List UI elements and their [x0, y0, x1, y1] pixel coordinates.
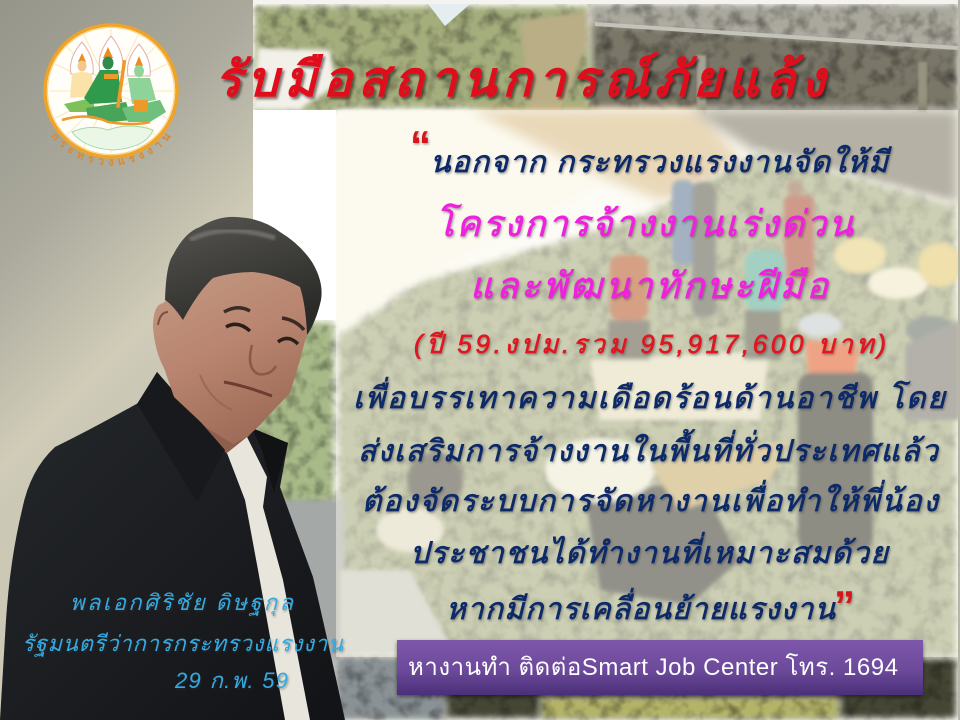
- quote text block: [353, 122, 947, 629]
- near bank vegetation: [336, 150, 958, 660]
- shirt: [227, 437, 310, 720]
- quote line 3: ส่งเสริมการจ้างงานในพื้นที่ทั่วประเทศแล้ว: [358, 429, 940, 468]
- contact text: หางานทำ ติดต่อSmart Job Center โทร. 1694: [408, 653, 898, 681]
- dark vegetation strip: [336, 657, 958, 720]
- date: 29 ก.พ. 59: [174, 668, 288, 693]
- workers: [340, 162, 960, 660]
- minister portrait: [0, 217, 345, 720]
- translucent washed overlay: [336, 110, 958, 657]
- clouds: [72, 126, 153, 150]
- jacket: [0, 372, 345, 720]
- attribution: [22, 590, 344, 693]
- hair: [165, 217, 322, 335]
- shirt collar left edge: [158, 372, 172, 398]
- right lapel: [252, 428, 288, 492]
- closing quote mark: ”: [834, 582, 855, 629]
- minister name: พลเอกศิริชัย ดิษฐกุล: [70, 590, 295, 616]
- eyes: [226, 324, 250, 331]
- ear shadow: [158, 312, 168, 325]
- water: [334, 107, 703, 116]
- quote line 1: นอกจาก กระทรวงแรงงานจัดให้มี: [430, 145, 892, 179]
- quote line 5: ประชาชนได้ทำงานที่เหมาะสมด้วย: [410, 532, 890, 570]
- highlighted project name: โครงการจ้างงานเร่งด่วน: [435, 203, 854, 244]
- neck: [178, 400, 268, 455]
- ministry name: กระทรวงแรงงาน: [51, 133, 171, 166]
- background photo: canal workers and bridge: [253, 4, 960, 720]
- quote line 2: เพื่อบรรเทาความเดือดร้อนด้านอาชีพ โดย: [353, 377, 947, 415]
- eyebrows: [224, 308, 250, 312]
- logo: Ministry of Labour seal: [43, 23, 179, 166]
- nose: [250, 345, 276, 374]
- opening quote mark: “: [410, 122, 431, 169]
- budget line: (ปี 59.งปม.รวม 95,917,600 บาท): [414, 329, 886, 359]
- quote line 6: หากมีการเคลื่อนย้ายแรงงาน: [446, 588, 836, 626]
- left grey panel: [0, 0, 253, 720]
- title: รับมือสถานการณ์ภัยแล้ง: [215, 52, 829, 107]
- contact callout: [397, 640, 923, 695]
- mouth: [224, 382, 272, 396]
- seal ring: [45, 25, 177, 157]
- highlighted skills line: และพัฒนาทักษะฝีมือ: [470, 265, 829, 306]
- minister role: รัฐมนตรีว่าการกระทรวงแรงงาน: [22, 631, 344, 657]
- bridge: [590, 4, 960, 110]
- three seated deities: [62, 36, 166, 124]
- hillside vegetation: [253, 4, 600, 115]
- jacket lapel: [137, 372, 225, 502]
- head: [153, 255, 308, 444]
- quote line 4: ต้องจัดระบบการจัดหางานเพื่อทำให้พี่น้อง: [362, 480, 940, 518]
